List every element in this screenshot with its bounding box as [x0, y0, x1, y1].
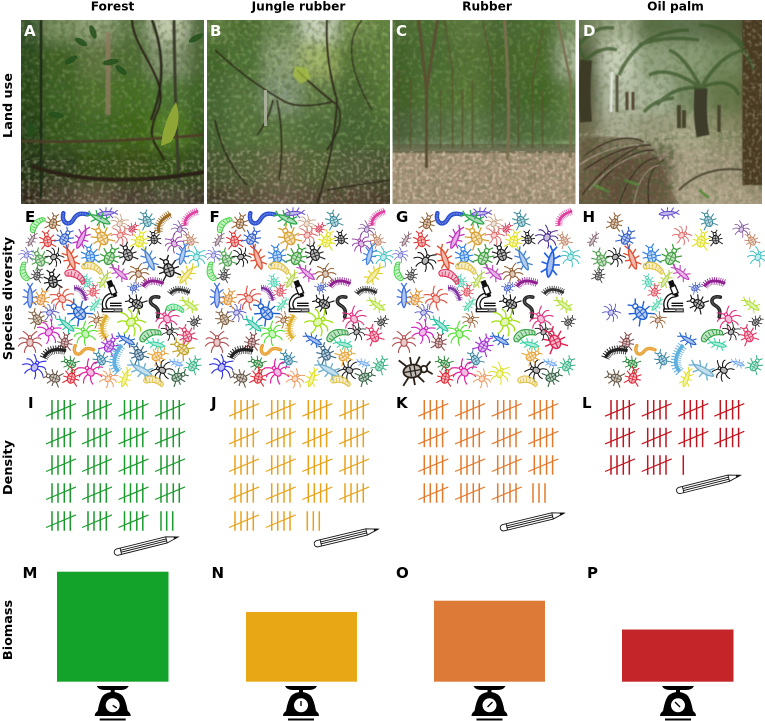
- panel I: tally, forest: [46, 400, 185, 531]
- panel F: species diversity, jungle rubber: [203, 206, 396, 393]
- panel letter K: K: [396, 394, 409, 412]
- scale icon: oil palm: [660, 686, 696, 720]
- panel J: tally, jungle rubber: [229, 400, 369, 531]
- panel letter I: I: [28, 394, 34, 412]
- panel E: species diversity, forest: [16, 206, 209, 393]
- photo C: rubber plantation: [392, 20, 576, 204]
- panel letter N: N: [212, 564, 224, 582]
- panel letter J: J: [210, 394, 217, 412]
- biomass bar: rubber: [434, 601, 545, 682]
- panel L: tally, oil palm: [605, 400, 744, 475]
- row label: Species diversity: Species diversity: [1, 236, 16, 360]
- panel letter D: D: [583, 22, 595, 40]
- biomass bar: jungle rubber: [246, 612, 357, 682]
- biomass bar: oil palm: [622, 630, 734, 682]
- pencil, rubber: [500, 510, 565, 532]
- pencil, forest: [114, 534, 179, 556]
- row label: Land use: Land use: [1, 73, 16, 138]
- panel letter H: H: [582, 208, 595, 226]
- panel K: tally, rubber: [418, 400, 558, 503]
- scale icon: jungle rubber: [283, 686, 319, 720]
- photo B: jungle rubber: [207, 20, 390, 204]
- pencil, jungle rubber: [314, 526, 379, 548]
- panel letter C: C: [396, 22, 407, 40]
- photo A: forest: [21, 20, 204, 204]
- panel letter L: L: [582, 394, 592, 412]
- panel letter F: F: [210, 208, 220, 226]
- row label: Density: Density: [1, 439, 16, 495]
- scale icon: forest: [95, 686, 131, 720]
- pencil, oil palm: [676, 472, 741, 494]
- panel letter O: O: [396, 564, 409, 582]
- row label: Biomass: Biomass: [1, 600, 16, 660]
- panel letter P: P: [587, 564, 598, 582]
- panel letter B: B: [210, 22, 221, 40]
- panel letter A: A: [24, 22, 36, 40]
- biomass bar: forest: [57, 572, 168, 682]
- scale icon: rubber: [472, 686, 508, 720]
- panel H: species diversity, oil palm: [586, 206, 765, 389]
- panel G: species diversity, rubber: [390, 206, 583, 393]
- panel letter E: E: [25, 208, 35, 226]
- photo D: oil palm: [579, 20, 762, 204]
- panel letter G: G: [396, 208, 408, 226]
- panel letter M: M: [22, 564, 37, 582]
